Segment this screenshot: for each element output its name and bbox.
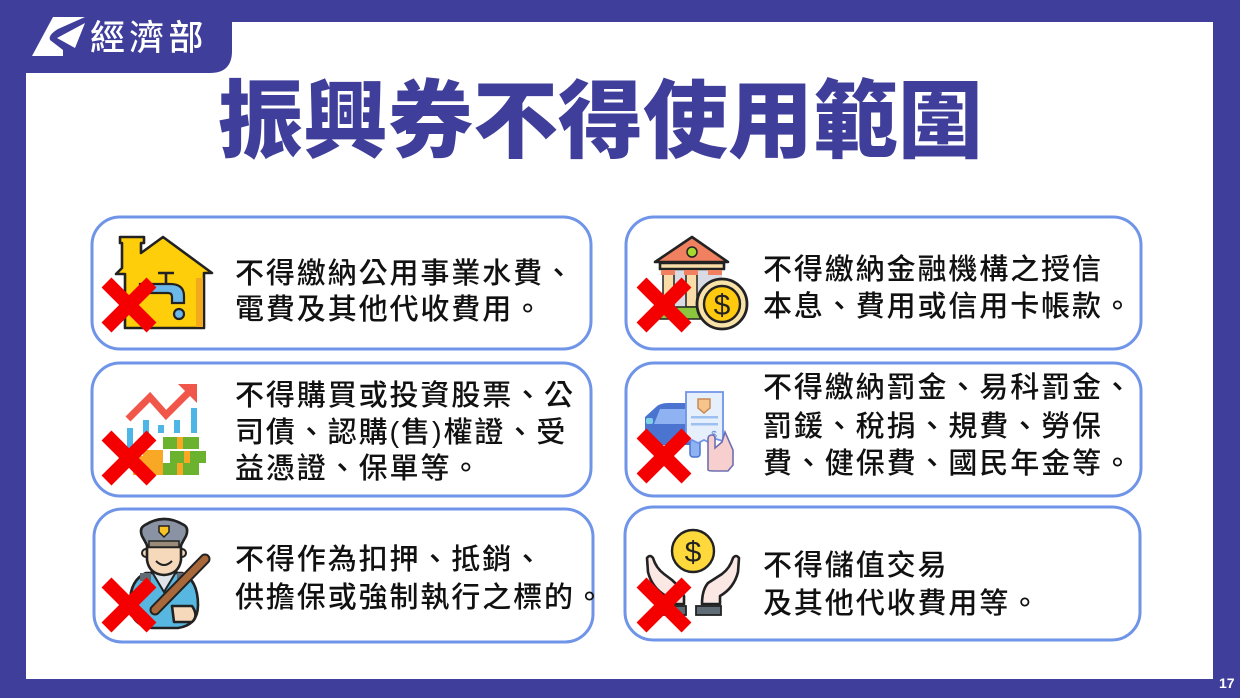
page number: 17 <box>1219 675 1235 691</box>
text block: 罰鍰、稅捐、規費、勞保 <box>763 410 1103 443</box>
title: 振興券不得使用範圍 <box>218 75 983 170</box>
icon: red cross <box>106 282 152 328</box>
panel: utility bills <box>92 217 591 349</box>
text block: 不得儲值交易 <box>763 549 948 582</box>
icon: red cross <box>642 434 686 478</box>
icon: red cross <box>106 436 152 480</box>
text block: 費、健保費、國民年金等。 <box>763 447 1134 480</box>
text block: 不得作為扣押、抵銷、 <box>235 543 544 576</box>
icon: coin over hands: $ <box>685 536 702 569</box>
panel: fines and taxes <box>626 363 1141 496</box>
text block: 電費及其他代收費用。 <box>235 293 544 326</box>
text block: 本息、費用或信用卡帳款。 <box>763 290 1134 323</box>
text block: 不得繳納金融機構之授信 <box>763 253 1103 286</box>
panel: stored value <box>625 507 1140 640</box>
text block: 司債、認購(售)權證、受 <box>235 416 567 449</box>
icon: red cross <box>642 582 686 628</box>
ministry logo tab <box>0 0 232 73</box>
text block: 不得繳納罰金、易科罰金、 <box>763 371 1134 404</box>
icon: coin over hands <box>647 530 739 615</box>
icon: red cross <box>106 582 152 628</box>
text block: 不得繳納公用事業水費、 <box>235 257 575 290</box>
icon: car ticket in hand <box>645 392 733 471</box>
icon: car ticket in hand: $ <box>711 430 717 441</box>
icon: rising chart and money <box>127 384 206 475</box>
panel: loans and credit cards <box>626 217 1141 349</box>
icon: house with faucet <box>116 237 212 328</box>
text block: 不得購買或投資股票、公 <box>235 379 575 412</box>
icon: police officer <box>130 519 205 628</box>
ministry name: 經濟部 <box>90 19 208 58</box>
icon: red cross <box>642 282 686 328</box>
icon: ministry emblem <box>32 17 85 56</box>
icon: bank with coin: $ <box>714 289 731 322</box>
icon: bank with coin <box>655 237 747 329</box>
text block: 供擔保或強制執行之標的。 <box>235 581 606 614</box>
text block: 及其他代收費用等。 <box>763 587 1041 620</box>
panel: seizure <box>94 509 606 642</box>
text block: 益憑證、保單等。 <box>235 452 482 485</box>
panel: securities <box>92 363 591 496</box>
